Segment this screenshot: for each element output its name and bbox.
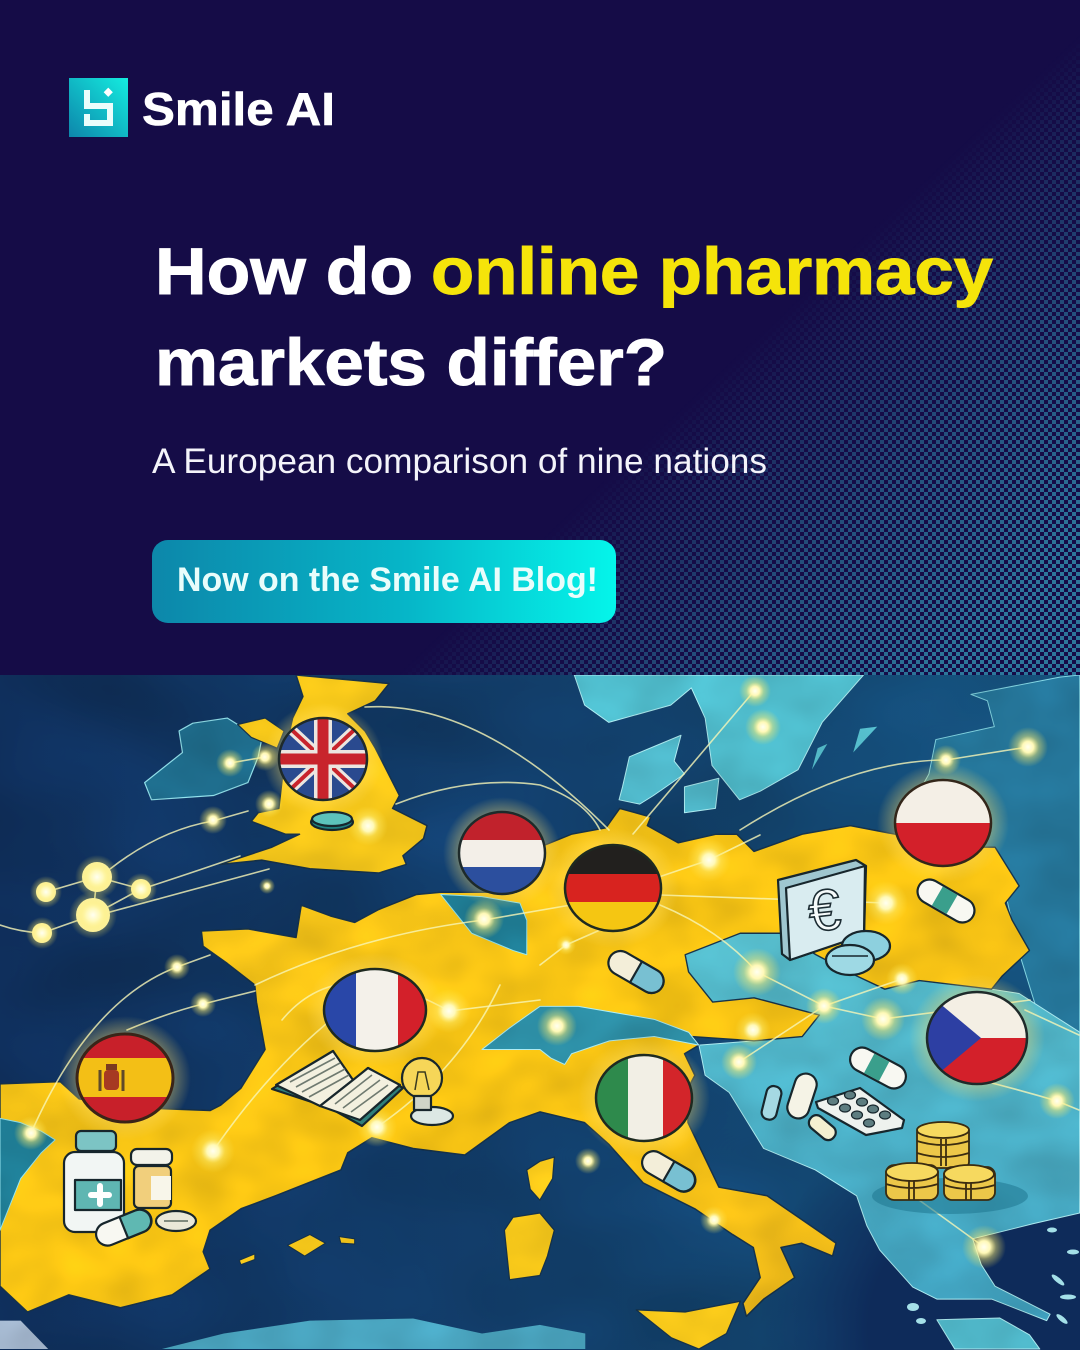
pill: United Kingdom [311, 812, 353, 830]
subtitle: A European comparison of nine nations [152, 442, 767, 481]
capsule: Poland [916, 878, 976, 924]
pills under euro card [826, 931, 890, 975]
open book [272, 1051, 403, 1126]
flag halos [59, 703, 1045, 1158]
Greek islands [907, 1228, 1079, 1325]
Danish islands [684, 778, 719, 813]
right stack [944, 1165, 995, 1200]
flag: Spain [77, 1034, 173, 1122]
Great Britain [220, 675, 427, 873]
logo icon [69, 78, 128, 137]
network nodes [14, 675, 1075, 1269]
coin stacks [886, 1122, 995, 1200]
title line one: How do [155, 234, 413, 308]
lightbulb [402, 1058, 453, 1125]
land masses [0, 675, 1080, 1349]
Peloponnese [937, 1318, 1040, 1349]
medicine bottle [64, 1131, 124, 1232]
left stack [886, 1163, 938, 1200]
coin shadow [872, 1178, 1028, 1214]
flag: Czech Republic [926, 992, 1028, 1084]
capsule: Balkans [846, 1043, 910, 1093]
euro symbol: € [805, 877, 844, 945]
Benelux [441, 895, 527, 955]
Portugal [0, 1118, 55, 1230]
capsule: Germany [607, 950, 665, 994]
Balkans [685, 933, 1080, 1321]
Scandinavia [574, 675, 864, 800]
flag: Poland [895, 780, 991, 867]
flag: Netherlands [459, 812, 545, 894]
button label: Now on the Smile AI Blog! [177, 561, 598, 599]
small pills group [760, 1071, 839, 1143]
medicine jar [131, 1149, 172, 1208]
Gotland [853, 727, 877, 752]
Ireland [145, 718, 262, 800]
Africa west [0, 1321, 48, 1349]
east mainland [895, 675, 1080, 1032]
capsule: Italy [638, 1147, 700, 1196]
title line two: markets differ? [155, 325, 667, 399]
map of Europe [0, 675, 1080, 1350]
logo [69, 78, 335, 137]
Corsica [527, 1157, 554, 1200]
Switzerland and Alps [482, 1006, 699, 1065]
button [152, 540, 616, 623]
bottle cross [91, 1186, 109, 1204]
Sicily [636, 1301, 740, 1349]
blister pack [816, 1088, 904, 1135]
flag: France [324, 969, 426, 1051]
flag: Italy [595, 1055, 693, 1141]
Denmark [619, 735, 684, 804]
logo wordmark: Smile AI [142, 83, 335, 135]
checker pattern fade [432, 68, 1080, 675]
top stack [917, 1122, 969, 1168]
flag: Germany [565, 845, 661, 931]
tablet: Spain [156, 1211, 196, 1231]
Sardinia [504, 1213, 554, 1280]
capsule: Spain [93, 1206, 155, 1249]
euro sign card [778, 860, 890, 975]
Balearic islands [239, 1235, 355, 1265]
yellow mainland [0, 808, 1029, 1316]
connection lines [0, 690, 1079, 1247]
Aegean dark water [794, 1190, 1080, 1350]
title [155, 234, 993, 399]
header background [0, 0, 1080, 675]
Northern Ireland [238, 718, 284, 748]
North Africa [162, 1318, 585, 1349]
flag: United Kingdom [279, 718, 367, 800]
sea [0, 675, 1080, 1350]
title highlight: online pharmacy [431, 234, 993, 308]
Oland [812, 744, 827, 770]
